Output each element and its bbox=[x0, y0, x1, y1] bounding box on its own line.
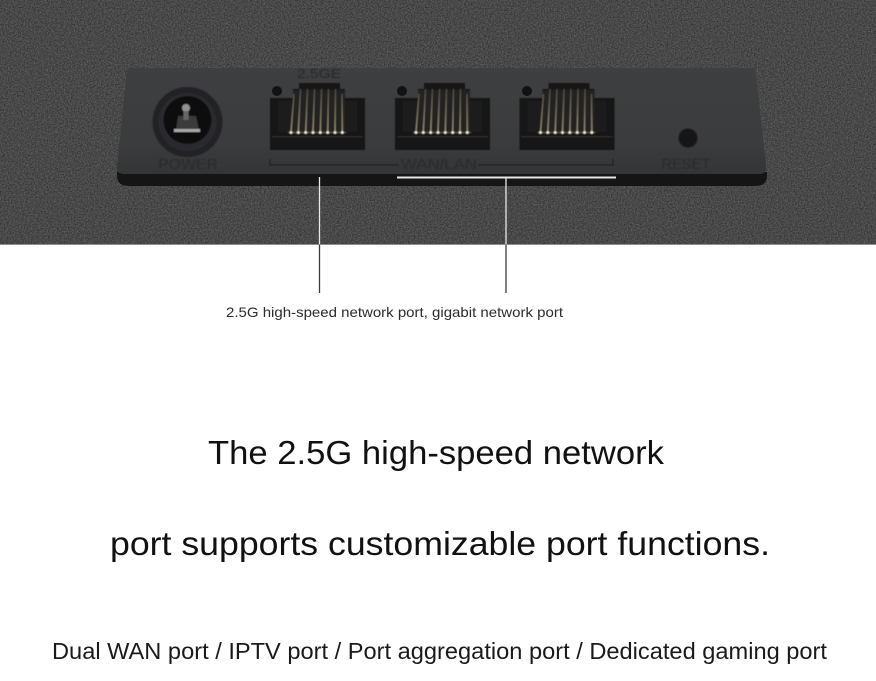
panel face bbox=[117, 68, 766, 174]
router textured casing bbox=[0, 0, 876, 245]
label: 2.5GE: 2.5GE bbox=[297, 66, 341, 81]
function list: Dual WAN port / IPTV port / Port aggregation port / Dedicated gaming port bbox=[52, 638, 828, 664]
label: RESET: RESET bbox=[662, 156, 710, 173]
label: WAN/LAN: WAN/LAN bbox=[401, 156, 477, 173]
port panel bbox=[117, 66, 767, 186]
ethernet port 2 bbox=[395, 83, 490, 150]
ethernet port 1 bbox=[270, 83, 365, 150]
label: POWER: POWER bbox=[158, 156, 218, 173]
panel base shadow lip bbox=[117, 172, 767, 186]
power jack bbox=[152, 87, 222, 157]
heading: The 2.5G high-speed network bbox=[208, 434, 665, 471]
ethernet port 3 bbox=[520, 83, 614, 150]
WAN/LAN bracket bbox=[270, 159, 613, 165]
heading: port supports customizable port functions. bbox=[110, 525, 770, 562]
indicator LEDs bbox=[272, 86, 532, 96]
heading bbox=[110, 434, 770, 562]
caption: 2.5G high-speed network port, gigabit network port bbox=[226, 304, 563, 320]
callout: gigabit ports bracket and leader line bbox=[397, 177, 616, 293]
reset pinhole bbox=[678, 128, 698, 148]
callout: 2.5G port leader line bbox=[318, 177, 320, 293]
